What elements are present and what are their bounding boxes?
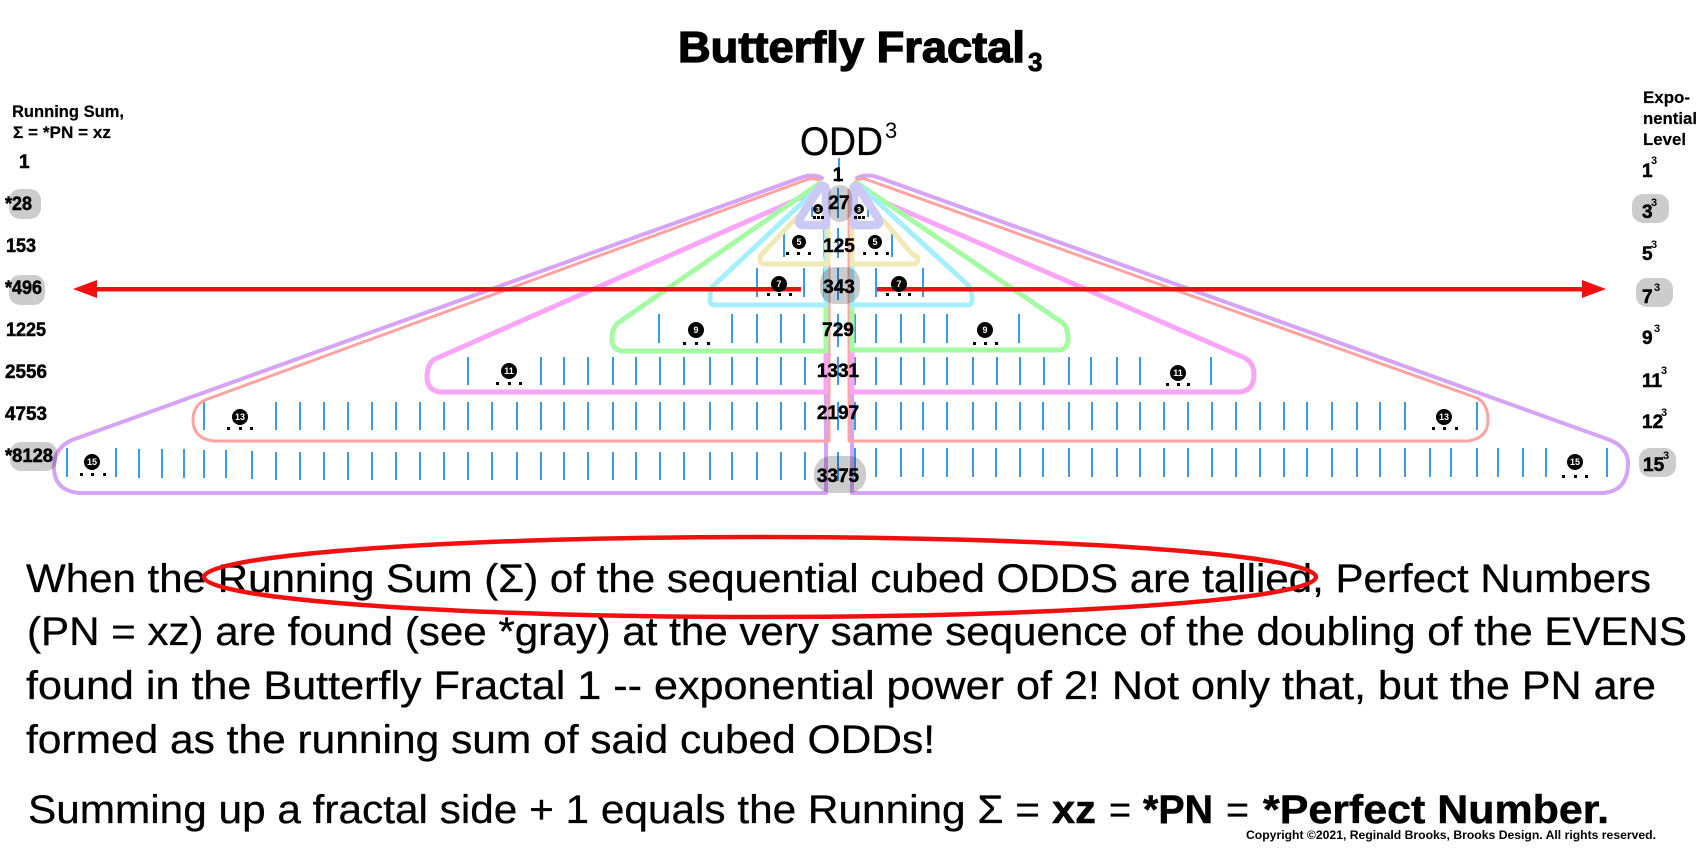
outline: 11 level wings (pink) (427, 190, 1254, 392)
numbered level badges with dots: 9 (693, 325, 699, 335)
numbered level badges with dots: 3 (816, 207, 820, 214)
column heading: exponential level: Level (1643, 130, 1686, 149)
exponential level column: 12 (1642, 412, 1663, 433)
center column of cubed odds: 125 (823, 236, 855, 257)
exponential level column: 3 (1661, 407, 1667, 419)
running sum column: 1 (19, 152, 30, 173)
numbered level badges with dots: 15 (87, 457, 97, 467)
summary statement: *PN (1143, 788, 1213, 832)
numbered level badges with dots: 3 (857, 207, 861, 214)
numbered level badges with dots: 5 (872, 237, 878, 247)
summary statement: = (1226, 788, 1249, 832)
summary statement (28, 788, 1609, 832)
exponential level column: 7 (1642, 287, 1653, 308)
column heading: running sum: Running Sum, (12, 102, 124, 121)
numbered level badges with dots (80, 204, 1588, 478)
running sum column: 2556 (5, 362, 47, 383)
exponential level column: 3 (1642, 202, 1653, 223)
exponential level column: 3 (1651, 239, 1657, 251)
red arrow right (877, 280, 1606, 298)
exponential level column: 3 (1651, 197, 1657, 209)
running sum column: *496 (5, 278, 42, 299)
exponential level column: 1 (1642, 161, 1653, 182)
blue tally ticks (67, 158, 1607, 481)
exponential level column: 3 (1663, 450, 1669, 462)
column heading: running sum (12, 102, 124, 142)
running sum column: *8128 (5, 446, 53, 467)
title: Butterfly Fractal (678, 23, 1025, 72)
explanatory paragraph: found in the Butterfly Fractal 1 -- exponential power of 2! Not only that, but the PN are (26, 664, 1656, 708)
red ellipse highlighting running sum phrase (204, 537, 1316, 617)
summary statement: = (1109, 788, 1131, 832)
center column of cubed odds: 729 (822, 320, 854, 341)
center column of cubed odds: 343 (823, 277, 855, 298)
explanatory paragraph: (PN = xz) are found (see *gray) at the very same sequence of the doubling of the EVENS (27, 610, 1687, 654)
center column of cubed odds: 27 (828, 193, 850, 214)
running sum column (5, 152, 53, 467)
outline: 13 level wings (salmon) (193, 179, 1488, 441)
center column of cubed odds (817, 165, 860, 487)
outline: 5 level wings (yellow) (760, 217, 918, 264)
exponential level column: 11 (1642, 371, 1663, 392)
outline: 15 level wings (purple) (54, 176, 1628, 493)
column heading: exponential level: Expo- (1643, 88, 1690, 107)
column heading: exponential level: nential (1643, 109, 1697, 128)
red arrow left (73, 280, 801, 298)
summary statement: Summing up a fractal side + 1 equals the Running Σ = (28, 788, 1040, 832)
summary statement: xz (1052, 788, 1096, 832)
exponential level column: 3 (1654, 282, 1660, 294)
running sum column: 4753 (5, 404, 47, 425)
numbered level badges with dots: 9 (982, 325, 988, 335)
numbered level badges with dots: 15 (1570, 457, 1580, 467)
numbered level badges with dots: 7 (896, 279, 902, 289)
column heading: running sum: Σ = *PN = xz (13, 123, 111, 142)
explanatory paragraph: When the Running Sum (Σ) of the sequential cubed ODDS are tallied, Perfect Numbers (26, 557, 1651, 601)
center column of cubed odds: 1331 (817, 361, 860, 382)
exponential level column (1642, 155, 1669, 476)
exponential level column: 5 (1642, 244, 1653, 265)
column heading: exponential level (1643, 88, 1697, 149)
numbered level badges with dots: 13 (235, 412, 245, 422)
center column of cubed odds: 3375 (817, 466, 860, 487)
outline: 3 level wings (lavender) (799, 186, 879, 225)
outline: 9 level wings (green) (612, 183, 1068, 351)
numbered level badges with dots: 13 (1439, 412, 1449, 422)
gray highlights on perfect-number rows (9, 185, 1676, 493)
exponential level column: 3 (1661, 365, 1667, 377)
title: 3 (1028, 47, 1042, 77)
numbered level badges with dots: 11 (1173, 368, 1183, 378)
running sum column: *28 (5, 194, 32, 215)
column heading: ODD cubed: ODD (800, 120, 883, 164)
numbered level badges with dots: 11 (504, 366, 514, 376)
column heading: ODD cubed: 3 (885, 118, 897, 143)
exponential level column: 15 (1643, 455, 1665, 476)
exponential level column: 9 (1642, 328, 1653, 349)
center column of cubed odds: 1 (833, 165, 844, 186)
outline: 7 level wings (cyan) (710, 186, 972, 305)
explanatory paragraph (26, 557, 1687, 762)
explanatory paragraph: formed as the running sum of said cubed ODDs! (26, 718, 935, 762)
running sum column: 153 (6, 236, 36, 257)
numbered level badges with dots: 7 (776, 279, 782, 289)
center column of cubed odds: 2197 (817, 403, 859, 424)
running sum column: 1225 (6, 320, 46, 341)
exponential level column: 3 (1654, 323, 1660, 335)
copyright: Copyright ©2021, Reginald Brooks, Brooks Design. All rights reserved. (1246, 828, 1656, 842)
numbered level badges with dots: 5 (796, 237, 802, 247)
exponential level column: 3 (1651, 155, 1657, 167)
summary statement: *Perfect Number. (1263, 788, 1609, 832)
